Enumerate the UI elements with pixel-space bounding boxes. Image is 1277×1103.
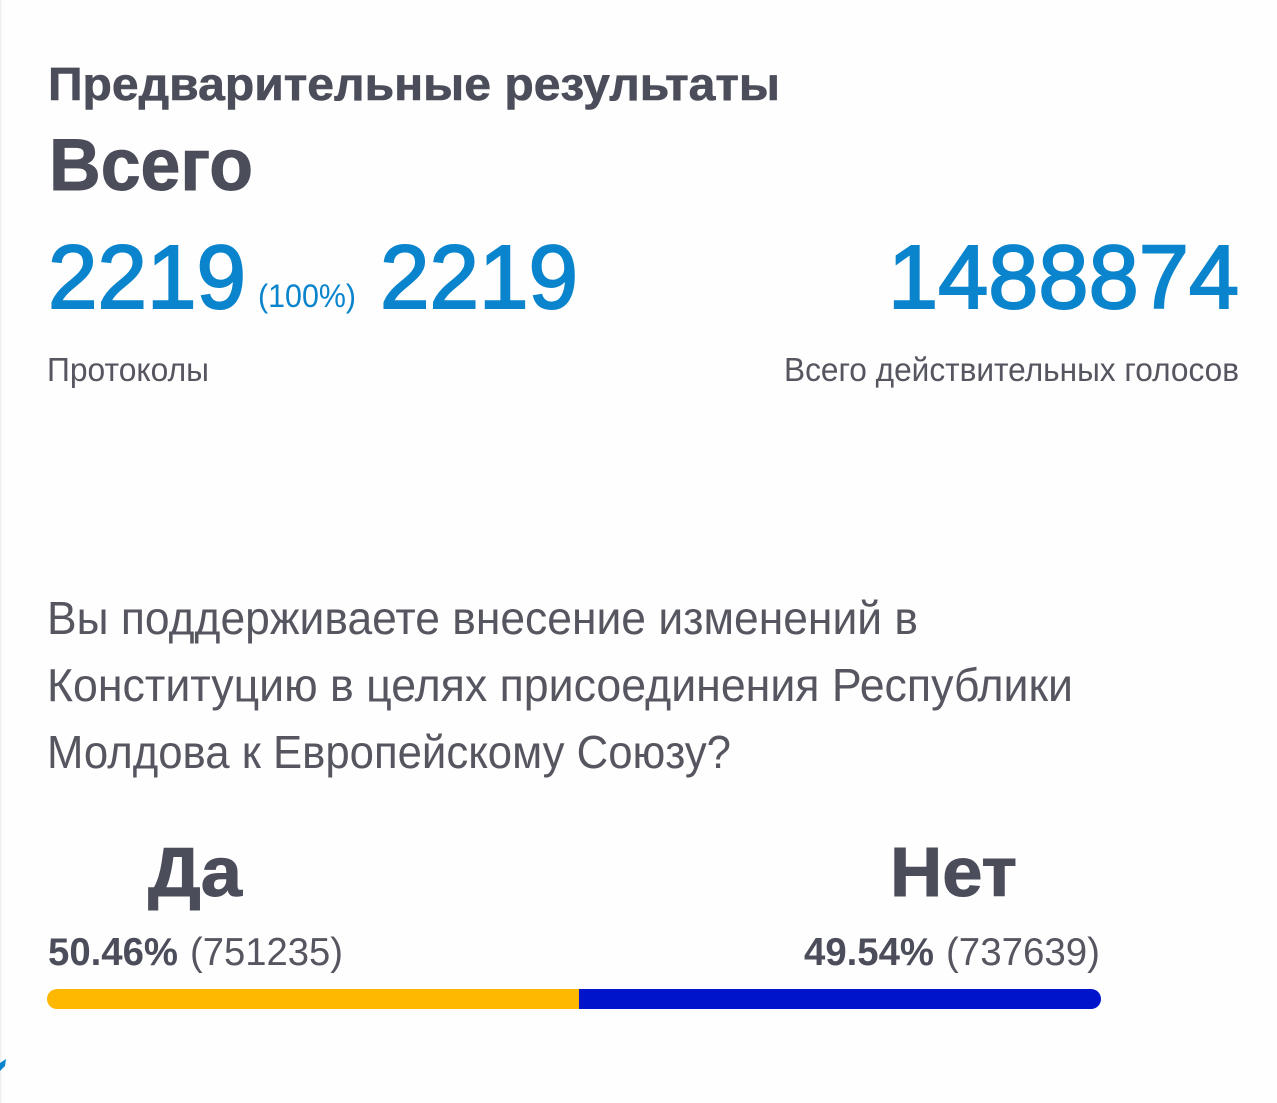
yes segment [47,989,579,1009]
protocols total number: 2219 [380,228,578,328]
yes result: (751235) [190,931,343,974]
referendum question [47,592,1073,778]
no label: Нет [890,833,1017,911]
option: no [804,833,1100,974]
valid votes stat [784,228,1239,388]
referendum question: Вы поддерживаете внесение изменений в [47,592,918,644]
yes label: Да [148,833,243,911]
valid votes number: 1488874 [888,228,1239,328]
yes result: 50.46% [48,931,178,974]
referendum question: Конституцию в целях присоединения Республики [47,659,1073,711]
protocols label: Протоколы [47,351,209,388]
no result: 49.54% [804,931,934,974]
protocols stat [47,228,578,388]
heading: total: Всего [49,125,253,206]
protocols percentage: (100%) [258,278,356,314]
result bar [47,989,1101,1009]
no segment [579,989,1101,1009]
icon: cropped blue mark [0,1059,6,1071]
no result: (737639) [946,931,1100,974]
protocols counted number: 2219 [48,228,246,328]
valid votes label: Всего действительных голосов [784,351,1239,388]
referendum question: Молдова к Европейскому Союзу? [47,726,731,778]
option: yes [48,833,343,974]
title: Предварительные результаты [48,58,780,110]
